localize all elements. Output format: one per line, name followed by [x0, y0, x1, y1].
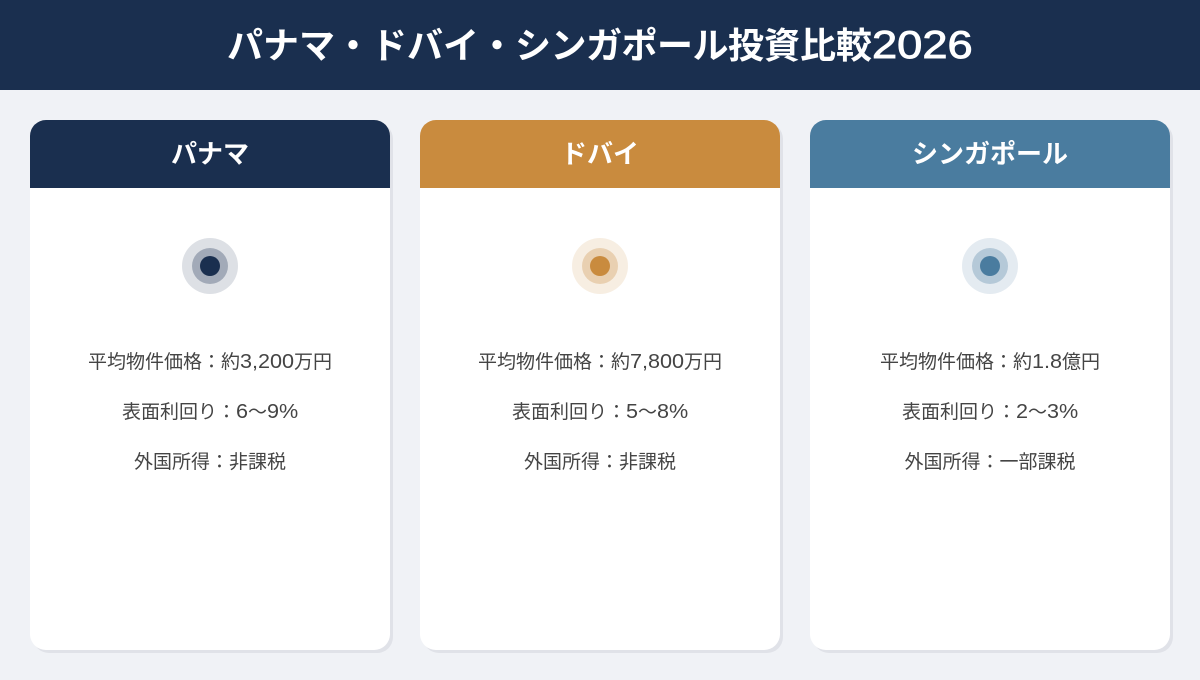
panel heading: Dubai — [420, 120, 780, 188]
panel heading: Panama — [30, 120, 390, 188]
panel heading: Dubai: ドバイ — [561, 139, 639, 169]
panel: Panama — [30, 120, 390, 650]
panel: Singapore — [810, 120, 1170, 650]
average price: 平均物件価格：約 億円 — [880, 352, 1100, 373]
average price: 3,200 — [240, 351, 294, 373]
panel heading: Singapore — [810, 120, 1170, 188]
foreign income tax: 外国所得：非課税 — [134, 452, 286, 473]
panel: Dubai — [420, 120, 780, 650]
icon: Singapore concentric circles — [962, 238, 1018, 294]
foreign income tax: 外国所得：一部課税 — [904, 452, 1076, 473]
gross yield: 表面利回り： 〜 — [122, 402, 267, 423]
title: 2026 — [872, 24, 973, 67]
title: パナマ・ドバイ・シンガポール投資比較 — [227, 25, 872, 66]
average price: 平均物件価格：約 万円 — [478, 352, 722, 373]
gross yield: 9% — [267, 401, 298, 423]
gross yield: 表面利回り： 〜 — [902, 402, 1047, 423]
average price: 平均物件価格：約 万円 — [88, 352, 332, 373]
average price: 7,800 — [630, 351, 684, 373]
gross yield: 6 — [236, 401, 248, 423]
panel heading: Panama: パナマ — [171, 139, 249, 169]
icon: Dubai concentric circles — [572, 238, 628, 294]
title — [0, 0, 1200, 90]
panel heading: Singapore: シンガポール — [912, 139, 1068, 169]
gross yield: 3% — [1047, 401, 1078, 423]
gross yield: 2 — [1016, 401, 1028, 423]
icon: Panama concentric circles — [182, 238, 238, 294]
gross yield: 5 — [626, 401, 638, 423]
gross yield: 8% — [657, 401, 688, 423]
foreign income tax: 外国所得：非課税 — [524, 452, 676, 473]
gross yield: 表面利回り： 〜 — [512, 402, 657, 423]
average price: 1.8 — [1032, 351, 1062, 373]
